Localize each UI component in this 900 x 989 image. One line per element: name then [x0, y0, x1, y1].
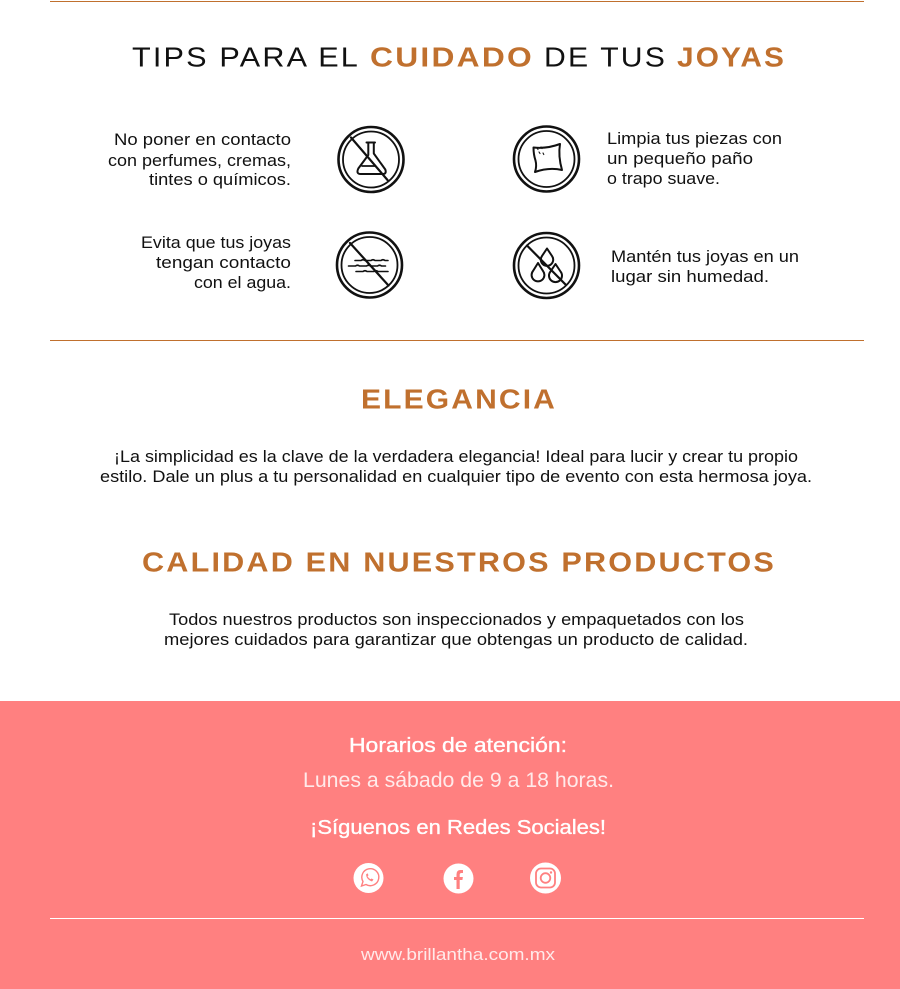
icon: instagram — [530, 862, 561, 894]
icon: soft cloth — [514, 126, 579, 192]
icon: facebook — [444, 864, 474, 894]
tip: water text: con el agua. — [194, 274, 291, 292]
tip: humidity text: Mantén tus joyas en un — [611, 248, 799, 266]
text: calidad paragraph: Todos nuestros productos son inspeccionados y empaquetados con los — [169, 611, 744, 629]
hours text: Lunes a sábado de 9 a 18 horas. — [303, 769, 614, 792]
hours label: Horarios de atención: — [349, 735, 567, 757]
tip: perfumes text: tintes o químicos. — [149, 171, 291, 189]
title: JOYAS — [677, 42, 786, 72]
tip: soft cloth text: un pequeño paño — [607, 150, 753, 168]
text: elegancia paragraph: ¡La simplicidad es la clave de la verdadera elegancia! Ideal para lucir y crear tu propio — [114, 448, 798, 466]
title: DE TUS — [544, 42, 667, 72]
tip: perfumes text: con perfumes, cremas, — [108, 152, 291, 170]
tip: soft cloth text: Limpia tus piezas con — [607, 130, 782, 148]
title — [132, 42, 786, 72]
text: elegancia paragraph — [100, 448, 812, 486]
heading: elegancia: ELEGANCIA — [361, 384, 557, 414]
tip: soft cloth text — [607, 130, 782, 188]
tip: water text: tengan contacto — [156, 254, 291, 272]
tip: soft cloth text: o trapo suave. — [607, 170, 720, 188]
text: calidad paragraph: mejores cuidados para garantizar que obtengas un producto de calidad. — [164, 631, 748, 649]
title: CUIDADO — [370, 42, 534, 72]
social heading: ¡Síguenos en Redes Sociales! — [310, 817, 606, 839]
tip: perfumes text: No poner en contacto — [114, 131, 291, 149]
icon: no water — [337, 232, 402, 298]
text: calidad paragraph — [164, 611, 748, 649]
text: elegancia paragraph: estilo. Dale un plus a tu personalidad en cualquier tipo de evento con esta hermosa joya. — [100, 468, 812, 486]
tip: water text — [141, 234, 291, 292]
tip: perfumes text — [108, 131, 291, 189]
footer panel — [0, 701, 900, 989]
tip: humidity text — [611, 248, 799, 286]
tip: humidity text: lugar sin humedad. — [611, 268, 769, 286]
icon: whatsapp — [354, 863, 384, 893]
icon: no humidity drops — [514, 233, 579, 298]
title: TIPS PARA EL — [132, 42, 360, 72]
website url: www.brillantha.com.mx — [360, 946, 556, 964]
icon: no chemicals flask — [338, 127, 404, 192]
heading: calidad: CALIDAD EN NUESTROS PRODUCTOS — [142, 546, 776, 578]
tip: water text: Evita que tus joyas — [141, 234, 291, 252]
